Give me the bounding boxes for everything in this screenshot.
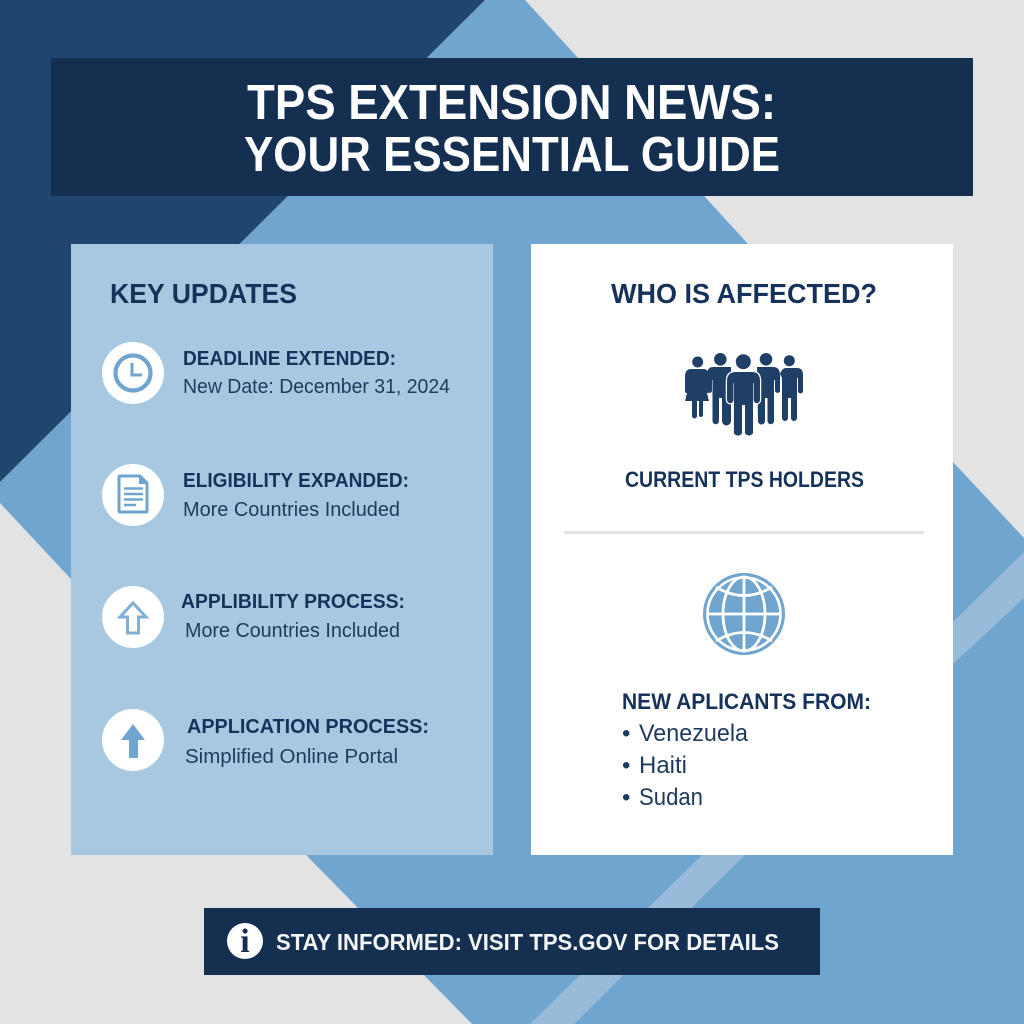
item: eligibility expanded: More Countries Included (183, 499, 400, 521)
list: new applicants: NEW APLICANTS FROM: (622, 689, 871, 714)
icon: info (227, 923, 263, 960)
icon: info: i (240, 923, 250, 960)
item: deadline extended: DEADLINE EXTENDED: (183, 348, 396, 370)
item: application process: APPLICATION PROCESS: (187, 716, 429, 738)
icon: solid up arrow (102, 709, 164, 771)
item: application process (102, 709, 429, 771)
item: applibility process: More Countries Included (185, 620, 400, 642)
icon: globe (704, 574, 784, 654)
item: application process: Simplified Online Portal (185, 746, 398, 768)
list: new applicants (622, 689, 871, 811)
icon: document (102, 464, 164, 526)
footer banner: STAY INFORMED: VISIT TPS.GOV FOR DETAILS (276, 929, 779, 955)
heading: key updates: KEY UPDATES (110, 278, 297, 309)
icon: group of people (685, 353, 803, 436)
title banner: TPS EXTENSION NEWS: (247, 76, 776, 130)
list: new applicants: • (622, 784, 630, 811)
panel: who is affected (531, 244, 953, 855)
title banner: YOUR ESSENTIAL GUIDE (244, 128, 780, 182)
item: applibility process: APPLIBILITY PROCESS: (181, 591, 405, 613)
item: eligibility expanded: ELIGIBILITY EXPANDED: (183, 470, 409, 492)
panel: key updates (71, 244, 493, 855)
icon: clock (102, 342, 164, 404)
label: current tps holders: CURRENT TPS HOLDERS (625, 467, 864, 492)
item: deadline extended (102, 342, 450, 404)
list: new applicants: • (622, 752, 630, 779)
list: new applicants: Sudan (639, 784, 703, 811)
list: new applicants: Haiti (639, 752, 687, 779)
footer banner (204, 908, 820, 975)
list: new applicants: Venezuela (639, 720, 749, 747)
heading: who is affected: WHO IS AFFECTED? (611, 278, 877, 309)
list: new applicants: • (622, 720, 630, 747)
item: deadline extended: New Date: December 31, 2024 (183, 376, 450, 398)
title banner (51, 58, 973, 196)
item: applibility process (102, 586, 405, 648)
icon: outlined up arrow (102, 586, 164, 648)
item: eligibility expanded (102, 464, 409, 526)
